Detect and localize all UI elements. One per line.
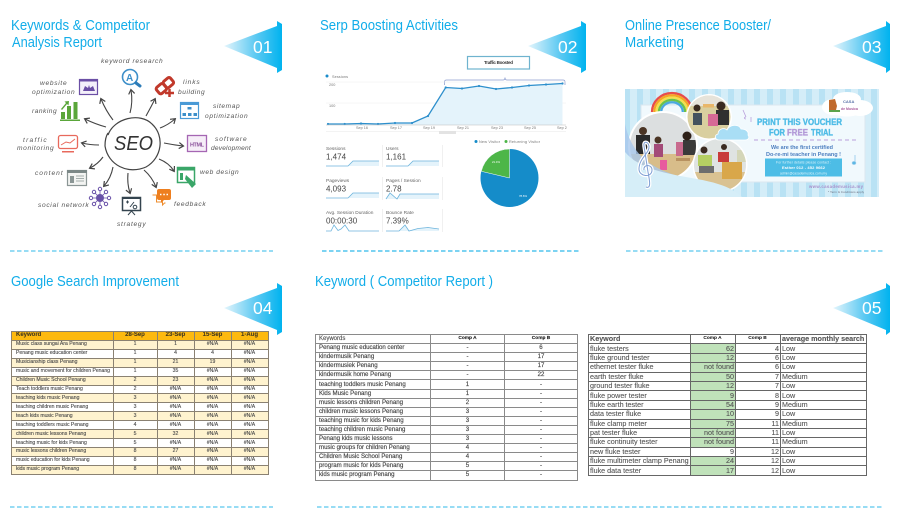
voucher website	[809, 184, 864, 194]
SEO topic labels: software	[215, 136, 247, 143]
voucher image	[625, 89, 879, 197]
table: competitor report fluke keywords	[588, 334, 867, 476]
table: google search rank improvement: Musicianship class Penang	[16, 359, 77, 365]
table: google search rank improvement: 4	[134, 422, 136, 428]
table: google search rank improvement: #N/A	[207, 386, 218, 392]
table: google search rank improvement: Teach toddlers music Penang	[16, 386, 83, 392]
voucher headline: PRINT THIS VOUCHER	[757, 117, 842, 127]
table: google search rank improvement: #N/A	[207, 431, 218, 437]
metric: users: Users	[386, 146, 399, 152]
table: competitor report music keywords: program music for kids Penang	[319, 462, 403, 469]
metric: bounce rate: 7.39%	[386, 216, 409, 226]
panel: serp boosting activities	[320, 18, 586, 232]
table: google search rank improvement: #N/A	[207, 440, 218, 446]
table: competitor report music keywords: 22	[538, 371, 544, 378]
table: google search rank improvement: 4	[211, 350, 214, 356]
voucher contact box	[765, 158, 842, 176]
table: competitor report music keywords: 3	[466, 435, 469, 442]
table: google search rank improvement: #N/A	[244, 341, 255, 347]
table: google search rank improvement: 8	[134, 457, 136, 463]
SEO topic labels	[17, 58, 252, 228]
table: competitor report music keywords: kindermusik Penang	[319, 353, 374, 360]
table: competitor report music keywords: 5	[466, 462, 469, 469]
table: google search rank improvement: #N/A	[170, 404, 181, 410]
logo cloud: de Musica	[841, 107, 858, 111]
metric: users: 1,161	[386, 152, 407, 162]
metric: pageviews: 4,093	[326, 184, 347, 194]
title: google search improvement: Google Search Improvement	[11, 274, 179, 290]
title: keywords and competitor analysis report: Analysis Report	[12, 35, 102, 51]
arrows radiating from SEO	[82, 90, 183, 193]
line chart: sessions: Sep 25	[524, 126, 536, 130]
voucher inner card	[641, 105, 865, 182]
table: google search rank improvement: #N/A	[244, 457, 255, 463]
line chart: sessions: Sep 23	[491, 126, 503, 130]
table: competitor report fluke keywords: Comp B	[748, 336, 767, 341]
table: google search rank improvement: Penang music education center	[16, 350, 87, 356]
callout: traffic boosted	[444, 56, 565, 85]
table: competitor report music keywords: music groups for children Penang	[319, 444, 410, 451]
table: competitor report music keywords: -	[540, 417, 542, 424]
table: competitor report music keywords: Comp B	[532, 336, 550, 341]
table: google search rank improvement: #N/A	[244, 440, 255, 446]
table: google search rank improvement: #N/A	[170, 395, 181, 401]
table: google search rank improvement: 3	[134, 413, 136, 419]
table: google search rank improvement: #N/A	[244, 404, 255, 410]
table: google search rank improvement: 28-Sep	[125, 332, 145, 338]
cloud	[715, 125, 749, 140]
icon: strategy board	[122, 197, 141, 215]
badge 02	[528, 21, 586, 73]
badge 01	[224, 21, 282, 73]
SEO topic labels: monitoring	[17, 145, 54, 152]
table: google search rank improvement: 35	[173, 368, 178, 374]
table: competitor report music keywords: -	[540, 399, 542, 406]
table: competitor report music keywords: -	[540, 453, 542, 460]
title: online presence booster marketing: Marketing	[625, 35, 684, 51]
swoosh with treble clef	[625, 124, 742, 197]
table: competitor report music keywords	[315, 334, 578, 481]
icon: social network	[89, 187, 111, 209]
title: keywords and competitor analysis report: Keywords & Competitor	[11, 18, 150, 34]
icon: html	[188, 136, 206, 152]
metric: pages per session: Pages / Session	[386, 178, 421, 184]
table: competitor report music keywords: Children Music School Penang	[319, 453, 402, 460]
table: google search rank improvement: 5	[134, 440, 136, 446]
metric: pages per session: 2.78	[386, 184, 402, 194]
SEO topic labels: development	[211, 145, 252, 152]
table: google search rank improvement: teaching children music Penang	[16, 404, 88, 410]
table: google search rank improvement: 5	[134, 431, 136, 437]
voucher website: www.casademusica.my	[808, 184, 864, 189]
badge 01: 01	[253, 37, 272, 57]
badge 05	[833, 283, 890, 335]
SEO circle	[105, 118, 160, 170]
SEO topic labels: keyword research	[101, 58, 163, 65]
voucher headline: FOR	[769, 128, 785, 138]
icon: feedback bubbles	[152, 189, 171, 205]
icon: html: HTML	[190, 142, 205, 148]
table: competitor report music keywords: -	[540, 408, 542, 415]
table: google search rank improvement: #N/A	[207, 368, 218, 374]
table: google search rank improvement: 1	[134, 368, 136, 374]
panel: keywords and competitor analysis	[11, 18, 282, 228]
table: google search rank improvement: teaching music for kids Penang	[16, 440, 87, 446]
table: google search rank improvement: teach kids music Penang	[16, 413, 73, 419]
SEO topic labels: website	[40, 80, 67, 87]
photo: top circle	[686, 94, 732, 140]
table: google search rank improvement: #N/A	[244, 413, 255, 419]
metric: sessions	[326, 146, 379, 166]
line chart: sessions: Sep 16	[356, 126, 368, 130]
icon: ranking bars	[60, 101, 80, 121]
table: google search rank improvement: #N/A	[170, 440, 181, 446]
icon: traffic monitoring	[58, 136, 78, 152]
photo: bottom circle	[692, 140, 748, 190]
line chart: sessions: Sep 19	[423, 126, 435, 130]
table: google search rank improvement: 15-Sep	[203, 332, 222, 338]
table: google search rank improvement: 8	[134, 466, 136, 472]
table: google search rank improvement: #N/A	[244, 431, 255, 437]
line chart: sessions: 100	[329, 104, 335, 108]
table: google search rank improvement: teaching kids music Penang	[16, 395, 79, 401]
SEO topic labels: strategy	[117, 221, 146, 228]
table: google search rank improvement: #N/A	[170, 386, 181, 392]
metric: bounce rate: Bounce Rate	[386, 210, 414, 216]
table: google search rank improvement: #N/A	[207, 466, 218, 472]
SEO topic labels: web design	[200, 169, 239, 176]
SEO circle: SEO	[114, 133, 153, 155]
divider 5	[317, 506, 883, 508]
metric: sessions: Sessions	[326, 146, 346, 152]
photo: large circle	[628, 111, 698, 176]
title: keyword competitor report: Keyword ( Competitor Report )	[315, 274, 493, 290]
metric: pageviews	[326, 178, 379, 198]
table: google search rank improvement: #N/A	[207, 457, 218, 463]
SEO topic labels: optimization	[205, 113, 248, 120]
line chart: sessions	[326, 74, 567, 134]
table: google search rank improvement: #N/A	[244, 359, 255, 365]
table: google search rank improvement: #N/A	[170, 466, 181, 472]
metric: pages per session	[386, 178, 439, 199]
table: google search rank improvement: music lessons children Penang	[16, 448, 86, 454]
table: google search rank improvement: #N/A	[244, 466, 255, 472]
line chart: sessions: Sessions	[332, 75, 348, 79]
table: google search rank improvement: #N/A	[207, 448, 218, 454]
table: competitor report music keywords: Penang music education center	[319, 344, 404, 351]
table: competitor report fluke keywords: Comp A	[703, 336, 722, 341]
table: google search rank improvement: 1	[174, 341, 177, 347]
voucher contact box: admin@casademusica.com.my	[780, 172, 827, 176]
table: google search rank improvement: 3	[134, 404, 136, 410]
table: competitor report music keywords: -	[466, 362, 469, 369]
table: competitor report music keywords: 17	[538, 353, 544, 360]
badge 05: 05	[862, 298, 881, 318]
badge 03: 03	[862, 37, 881, 57]
table: competitor report music keywords: 17	[538, 362, 544, 369]
logo cloud	[822, 92, 873, 116]
table: competitor report music keywords: kids music program Penang	[319, 471, 395, 478]
icon: keyword research magnifier: A	[126, 73, 133, 84]
table: google search rank improvement: 1-Aug	[241, 332, 258, 338]
SEO topic labels: social network	[38, 202, 89, 209]
table: google search rank improvement: 2	[134, 386, 136, 392]
table: google search rank improvement: #N/A	[244, 368, 255, 374]
voucher headline	[757, 118, 842, 136]
table: competitor report music keywords: 4	[466, 444, 469, 451]
table: competitor report music keywords: 5	[466, 471, 469, 478]
badge 02: 02	[558, 37, 577, 57]
SEO topic labels: links	[183, 79, 200, 86]
table: competitor report music keywords: 3	[466, 417, 469, 424]
table: google search rank improvement: #N/A	[207, 395, 218, 401]
line chart: sessions: Sep 2	[557, 126, 567, 130]
voucher subheading: We are the first certified	[771, 145, 833, 151]
pie chart: new vs returning visitor: Returning Visitor	[509, 140, 541, 144]
table: google search rank improvement: 3	[134, 395, 136, 401]
pie chart: new vs returning visitor: 78.6%	[519, 194, 527, 198]
table: google search rank improvement: 2	[134, 377, 136, 383]
icon: sitemap	[180, 102, 199, 118]
table: google search rank improvement: 4	[174, 350, 177, 356]
SEO topic labels: content	[35, 170, 64, 177]
table: google search rank improvement: #N/A	[207, 377, 218, 383]
table: google search rank improvement: #N/A	[170, 422, 181, 428]
title: serp boosting activities: Serp Boosting Activities	[320, 18, 458, 34]
SEO topic labels: traffic	[23, 137, 47, 144]
table: google search rank improvement: #N/A	[244, 377, 255, 383]
metric: users	[386, 146, 439, 166]
table: competitor report music keywords: music lessons children Penang	[319, 399, 403, 406]
table: competitor report music keywords: teaching toddlers music Penang	[319, 381, 406, 388]
metric: bounce rate	[386, 210, 439, 231]
table: google search rank improvement: 27	[173, 448, 178, 454]
table: competitor report music keywords: -	[540, 381, 542, 388]
table: competitor report music keywords: -	[540, 462, 542, 469]
table: competitor report music keywords: -	[540, 471, 542, 478]
voucher dashed rule	[754, 140, 856, 141]
badge 03	[833, 21, 890, 73]
panel heading: keyword competitor report	[315, 274, 890, 335]
table: google search rank improvement: #N/A	[207, 341, 218, 347]
title: online presence booster marketing: Online Presence Booster/	[625, 18, 772, 34]
table: competitor report music keywords: -	[540, 390, 542, 397]
table: competitor report music keywords: 2	[466, 399, 469, 406]
voucher contact box: Esther 012 - 452 9662	[782, 165, 826, 170]
table: google search rank improvement: Keyword	[16, 332, 41, 338]
table: competitor report music keywords: 3	[466, 408, 469, 415]
table: competitor report music keywords: -	[466, 344, 469, 351]
table: google search rank improvement: 1	[134, 350, 136, 356]
SEO topic labels: building	[178, 89, 205, 96]
table: competitor report music keywords: 6	[539, 344, 543, 351]
badge 04: 04	[253, 298, 273, 318]
icon: content page	[67, 170, 87, 186]
table: google search rank improvement	[11, 331, 269, 475]
table: google search rank improvement: teaching toddlers music Penang	[16, 422, 88, 428]
metric: pageviews: Pageviews	[326, 178, 350, 184]
callout: traffic boosted: Traffic Boosted	[484, 60, 513, 65]
icon: web design	[177, 167, 196, 188]
table: competitor report music keywords: teaching music for kids Penang	[319, 417, 404, 424]
table: competitor report music keywords: Comp A	[458, 336, 477, 341]
title: keywords and competitor analysis report	[11, 18, 150, 51]
table: google search rank improvement: 8	[134, 448, 136, 454]
panel: online presence booster	[625, 18, 890, 197]
icon: website optimization	[79, 79, 98, 94]
divider 2	[322, 250, 579, 252]
metric: average session duration: Avg. Session Duration	[326, 210, 374, 216]
title: online presence booster marketing	[625, 18, 772, 51]
divider 1	[10, 250, 273, 252]
rainbow	[652, 93, 692, 112]
table: competitor report music keywords: teaching children music Penang	[319, 426, 405, 433]
voucher headline: TRIAL	[811, 128, 833, 138]
table: competitor report music keywords: 4	[466, 453, 469, 460]
table: google search rank improvement: #N/A	[244, 448, 255, 454]
table: google search rank improvement: music and movement for children Penang	[16, 368, 110, 374]
icon: links building	[155, 77, 174, 97]
music notes	[743, 110, 856, 164]
table: google search rank improvement: #N/A	[207, 413, 218, 419]
table: competitor report music keywords: 1	[466, 381, 469, 388]
SEO topic labels: feedback	[174, 201, 206, 208]
metric: average session duration	[326, 210, 379, 231]
logo cloud: CASA	[843, 99, 854, 104]
table: competitor report music keywords: 3	[466, 426, 469, 433]
table: competitor report music keywords: Penang kids music lessons	[319, 435, 392, 442]
table: competitor report music keywords: -	[540, 444, 542, 451]
table: google search rank improvement: 1	[134, 341, 136, 347]
table: google search rank improvement: #N/A	[207, 422, 218, 428]
pie chart: new vs returning visitor: New Visitor	[479, 140, 501, 144]
table: competitor report music keywords: kindermusiek Penang	[319, 362, 378, 369]
icon: keyword research magnifier	[122, 70, 140, 86]
SEO topic labels: ranking	[32, 108, 57, 115]
table: competitor report music keywords: Kids Music Penang	[319, 390, 371, 397]
line chart: sessions: Sep 21	[457, 126, 469, 130]
table: competitor report music keywords: -	[540, 426, 542, 433]
table: google search rank improvement: Music class sungai Ara Penang	[16, 341, 87, 347]
table: google search rank improvement: kids music program Penang	[16, 466, 79, 472]
table: competitor report music keywords: kindermusik home Penang	[319, 371, 391, 378]
metric dividers	[382, 145, 442, 232]
table: google search rank improvement: #N/A	[170, 457, 181, 463]
voucher subheading	[766, 145, 841, 158]
table: google search rank improvement: Children Music School Penang	[16, 377, 86, 383]
table: google search rank improvement: #N/A	[244, 395, 255, 401]
table: google search rank improvement: children music lessons Penang	[16, 431, 86, 437]
table: google search rank improvement: #N/A	[244, 350, 255, 356]
voucher headline: FREE	[787, 128, 808, 138]
panel heading: google search improvement	[11, 274, 282, 335]
table: competitor report music keywords: -	[466, 353, 469, 360]
table: google search rank improvement: music education for kids Penang	[16, 457, 90, 463]
metric: average session duration: 00:00:30	[326, 216, 358, 226]
table: competitor report music keywords: -	[540, 435, 542, 442]
table: google search rank improvement: #N/A	[207, 404, 218, 410]
table: competitor report music keywords: 1	[466, 390, 469, 397]
voucher contact box: For further details please contact :	[776, 160, 831, 164]
table: google search rank improvement: #N/A	[244, 386, 255, 392]
table: google search rank improvement: 23	[173, 377, 178, 383]
divider 4	[10, 506, 273, 508]
SEO topic labels: optimization	[32, 89, 75, 96]
table: google search rank improvement: 32	[173, 431, 178, 437]
table: competitor report music keywords: Keywords	[319, 336, 345, 342]
table: google search rank improvement: 23-Sep	[166, 332, 185, 338]
SEO topic labels: sitemap	[213, 103, 240, 110]
table: competitor report music keywords: children music lessons Penang	[319, 408, 403, 415]
table: google search rank improvement: #N/A	[244, 422, 255, 428]
badge 04	[224, 283, 282, 335]
voucher subheading: Do-re-mi teacher in Penang !	[766, 152, 841, 158]
table: google search rank improvement: 1	[134, 359, 136, 365]
line chart: sessions: Sep 17	[390, 126, 402, 130]
line chart: sessions: 200	[329, 83, 335, 87]
table: google search rank improvement: #N/A	[170, 413, 181, 419]
table: google search rank improvement: 21	[173, 359, 178, 365]
metric: sessions: 1,474	[326, 152, 347, 162]
divider 3	[626, 250, 883, 252]
table: competitor report music keywords: -	[466, 371, 469, 378]
pie chart: new vs returning visitor: 21.4%	[492, 160, 500, 164]
table: google search rank improvement: 19	[210, 359, 215, 365]
voucher website: * Term & Conditions apply	[828, 190, 865, 194]
pie chart: new vs returning visitor	[474, 140, 541, 207]
